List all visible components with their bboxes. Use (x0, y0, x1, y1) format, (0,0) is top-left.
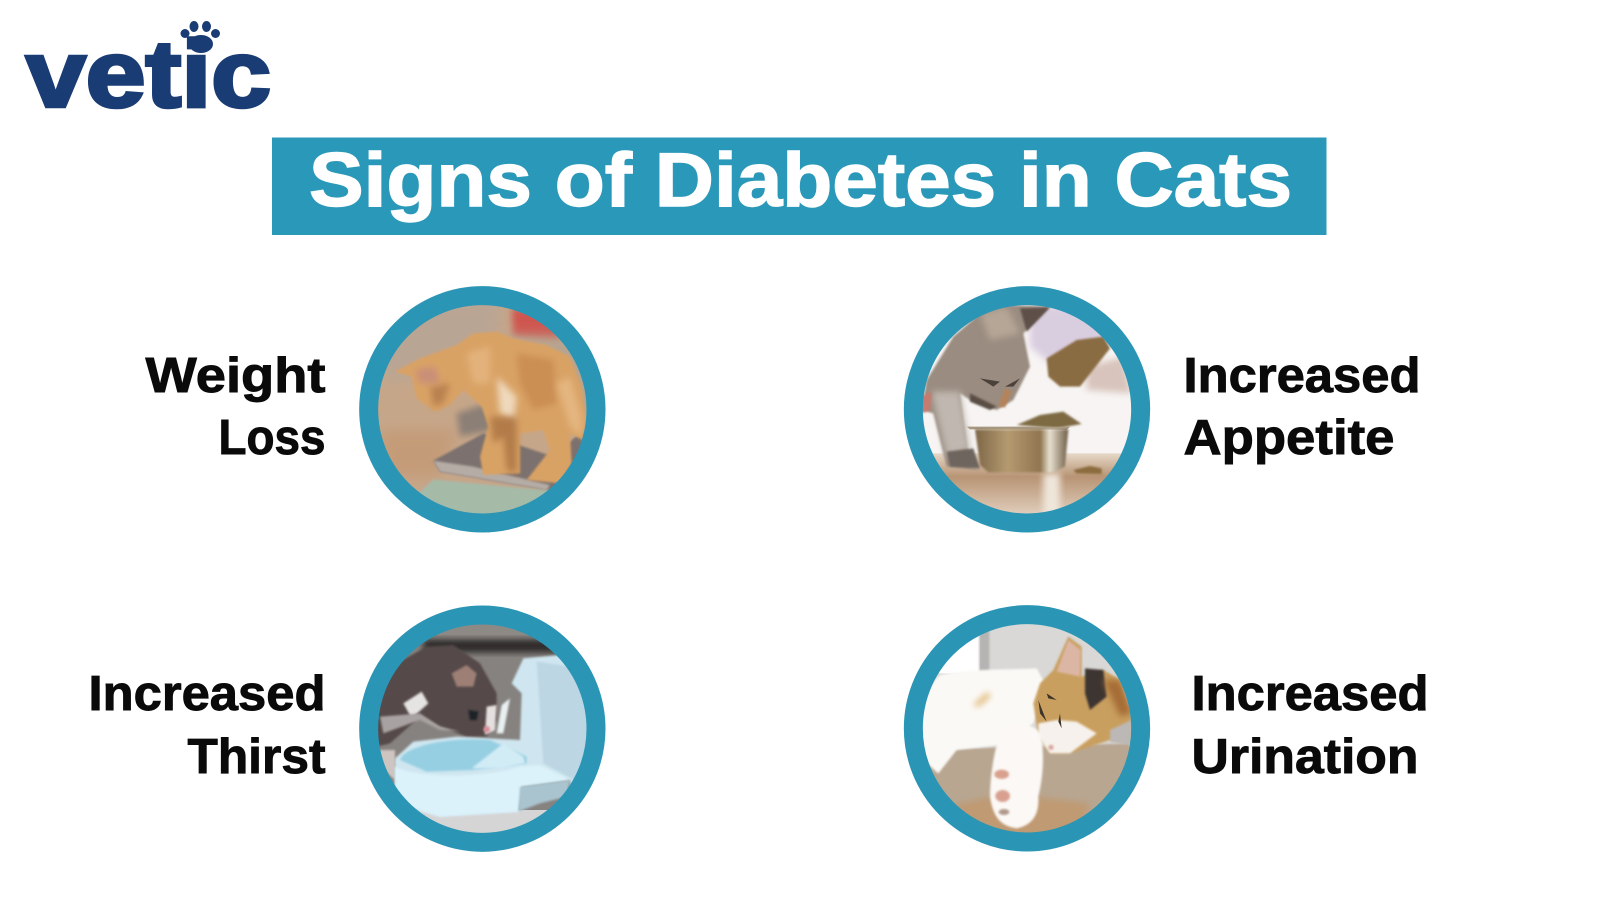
label: increased thirst: Increased (88, 667, 326, 721)
photo circle: sleeping calico cat (913, 615, 1141, 843)
photo ring (369, 296, 596, 523)
label: weight loss (146, 349, 326, 465)
photo circle: thin orange cat (369, 296, 596, 523)
label: increased appetite: Increased (1184, 349, 1420, 403)
title: Signs of Diabetes in Cats (309, 138, 1292, 223)
panel: increased thirst (88, 615, 596, 843)
label: increased urination: Urination (1192, 730, 1418, 784)
label: increased urination: Increased (1192, 667, 1428, 721)
photo ring (913, 296, 1141, 523)
label: weight loss: Loss (218, 411, 326, 465)
logo: vetic (26, 21, 271, 128)
label: increased thirst (88, 667, 326, 784)
panel: weight loss (146, 296, 596, 523)
photo ring (369, 615, 596, 842)
label: increased urination (1192, 667, 1428, 784)
photo circle: cat at water fountain (369, 615, 596, 843)
banner background (272, 138, 1326, 235)
label: weight loss: Weight (146, 349, 326, 403)
logo wordmark: vetic (26, 22, 271, 128)
label: increased appetite (1184, 349, 1420, 465)
label: increased appetite: Appetite (1184, 411, 1394, 465)
label: increased thirst: Thirst (188, 730, 326, 784)
photo ring (913, 615, 1141, 842)
panel: increased appetite (913, 296, 1420, 523)
panel: increased urination (913, 615, 1428, 843)
photo circle: cat eating kibble (913, 296, 1141, 523)
icon: paw print (180, 21, 220, 53)
title banner (272, 138, 1326, 235)
